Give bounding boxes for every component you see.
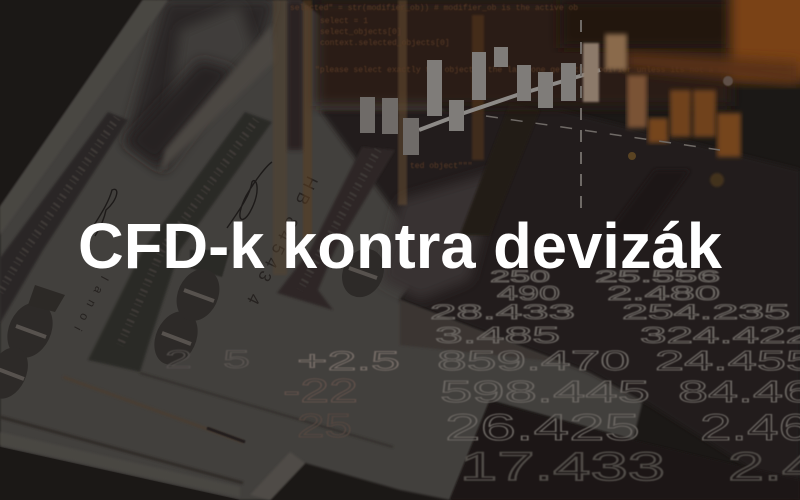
ticker numbers: 28.433 xyxy=(430,301,575,324)
ticker numbers: 25 xyxy=(297,407,352,444)
bill body: right dark stack xyxy=(320,110,800,500)
dark fold lines xyxy=(63,377,243,442)
ticker numbers: -22 xyxy=(283,372,358,409)
candles xyxy=(360,43,599,155)
ticker numbers: 2.480 xyxy=(607,283,720,305)
ticker numbers: 25.556 xyxy=(595,267,720,286)
dashed guide lines xyxy=(486,116,720,150)
ticker numbers: 490 xyxy=(497,283,560,305)
candlestick chart xyxy=(360,20,720,210)
ticker numbers: 24.455 xyxy=(655,345,800,376)
ticker numbers: 17.433 xyxy=(460,445,665,489)
ticker numbers: 324.422 xyxy=(640,322,800,348)
strip engraving texture xyxy=(0,118,378,345)
code text: selected" = str(modifier_ob)) # modifier_ob is the active ob xyxy=(290,4,578,13)
bill white margin bands xyxy=(0,0,168,235)
code text: select = 1 xyxy=(320,17,368,26)
dollar value ovals xyxy=(0,295,61,365)
photo: dollar bills: Ianoi xyxy=(71,274,112,333)
ticker numbers: 250 xyxy=(490,267,550,286)
ticker numbers: 84.46 xyxy=(678,374,800,409)
blurred portrait area xyxy=(125,0,275,170)
ticker numbers: +2.5 xyxy=(297,346,400,376)
trend line xyxy=(419,70,600,130)
dark ornamental strips xyxy=(0,112,128,323)
ticker numbers: 254.235 xyxy=(622,301,790,324)
code text: context.selected_objects[0] xyxy=(320,39,450,48)
ticker numbers: 3.485 xyxy=(435,322,560,348)
ticker numbers: 2 xyxy=(165,346,192,374)
code text xyxy=(290,4,742,171)
title: CFD-k kontra devizák xyxy=(78,210,722,282)
serial number: HB 84543 4 xyxy=(243,173,321,307)
ticker numbers xyxy=(165,267,800,489)
ticker numbers: 859.470 xyxy=(437,345,630,376)
ticker numbers: 598.445 xyxy=(440,374,650,409)
code screen overlay xyxy=(273,0,742,275)
code text: ted object""" xyxy=(410,162,472,171)
tan vertical strips xyxy=(273,0,287,275)
ticker numbers: 26.425 xyxy=(445,407,640,448)
code text: select_objects[0] xyxy=(320,28,402,37)
ticker numbers: 2.4 xyxy=(728,445,800,489)
code text: "please select exactly two objects, the last one gets the modifier unless its not a mesh" xyxy=(315,66,742,75)
ticker numbers: 5 xyxy=(223,346,250,374)
ticker numbers: 2.46 xyxy=(700,407,800,448)
signature strokes xyxy=(85,162,272,240)
orange blurred lights xyxy=(605,0,800,187)
